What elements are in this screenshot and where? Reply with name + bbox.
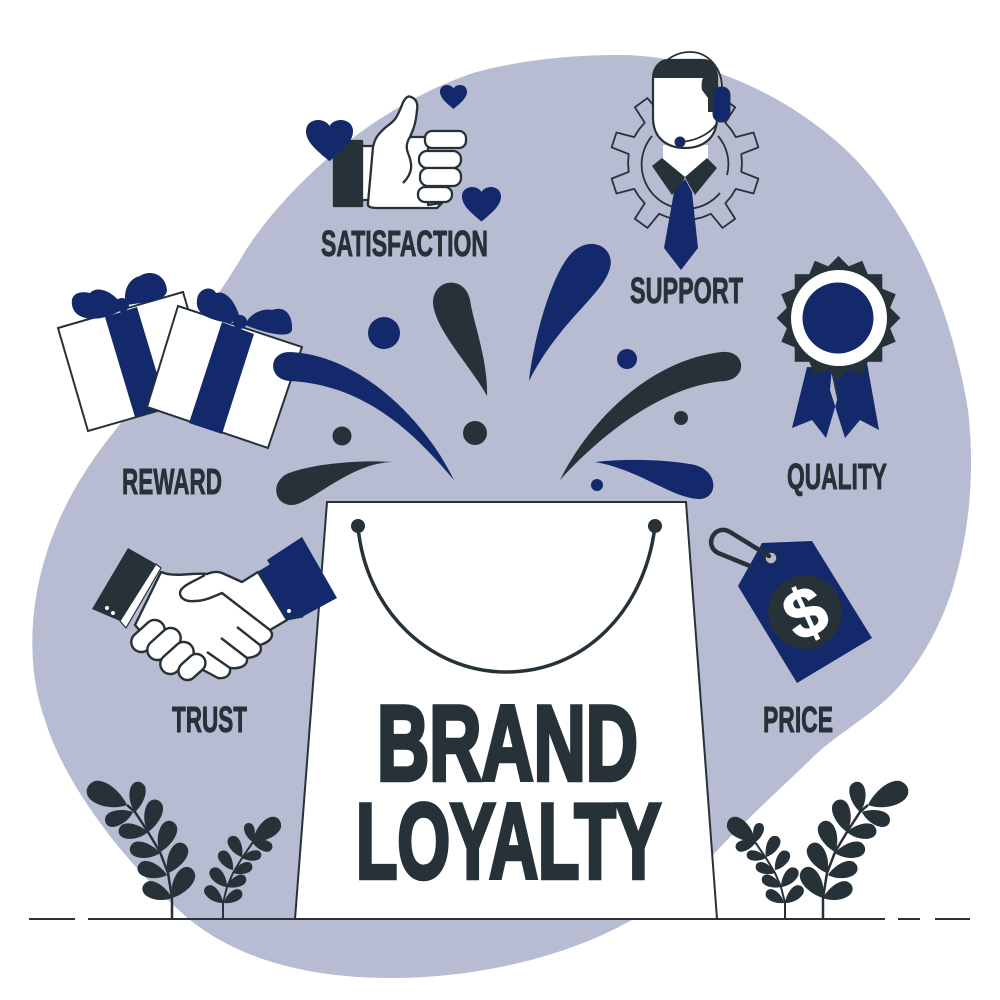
plant: right small <box>723 813 806 919</box>
dollar sign: $ <box>771 569 840 656</box>
bag handle <box>358 526 655 672</box>
cuff <box>334 141 362 206</box>
gear outline <box>609 88 761 238</box>
hair <box>653 60 718 112</box>
splash shapes <box>273 244 741 505</box>
title <box>356 683 661 901</box>
collar <box>652 158 717 195</box>
front gift box <box>147 289 302 448</box>
label: trust: TRUST <box>172 699 247 740</box>
head <box>653 60 717 148</box>
coin <box>768 575 842 649</box>
left cuff <box>92 548 161 628</box>
wrist <box>362 146 376 200</box>
hands <box>127 572 287 684</box>
icon: price tag <box>711 530 872 683</box>
back gift box <box>58 273 213 431</box>
icon: handshake <box>92 537 337 684</box>
headset <box>657 52 722 142</box>
icon: hearts <box>306 85 501 222</box>
tag body <box>738 541 872 683</box>
plant: left small <box>202 813 285 919</box>
label: reward: REWARD <box>122 461 222 502</box>
right cuff <box>258 537 337 620</box>
tie <box>664 179 698 270</box>
ribbon tails <box>792 363 879 438</box>
icon: thumbs up <box>334 96 466 208</box>
label: support: SUPPORT <box>630 270 743 311</box>
icon: support agent and gear <box>609 52 761 270</box>
label: price: PRICE <box>763 699 833 740</box>
label: satisfaction: SATISFACTION <box>321 223 488 264</box>
plant: left large <box>83 776 199 919</box>
label: quality: QUALITY <box>787 456 887 497</box>
ground line <box>29 918 970 920</box>
star seal <box>777 256 900 380</box>
title: BRAND <box>377 683 638 803</box>
icon: quality rosette <box>777 256 900 438</box>
plant: right large <box>796 776 912 919</box>
neck <box>663 145 708 177</box>
paper clip <box>711 530 769 566</box>
hand <box>368 96 442 208</box>
bag body <box>295 502 717 919</box>
icon: gift boxes <box>58 273 302 448</box>
shopping bag <box>295 502 717 919</box>
title: LOYALTY <box>356 781 661 901</box>
